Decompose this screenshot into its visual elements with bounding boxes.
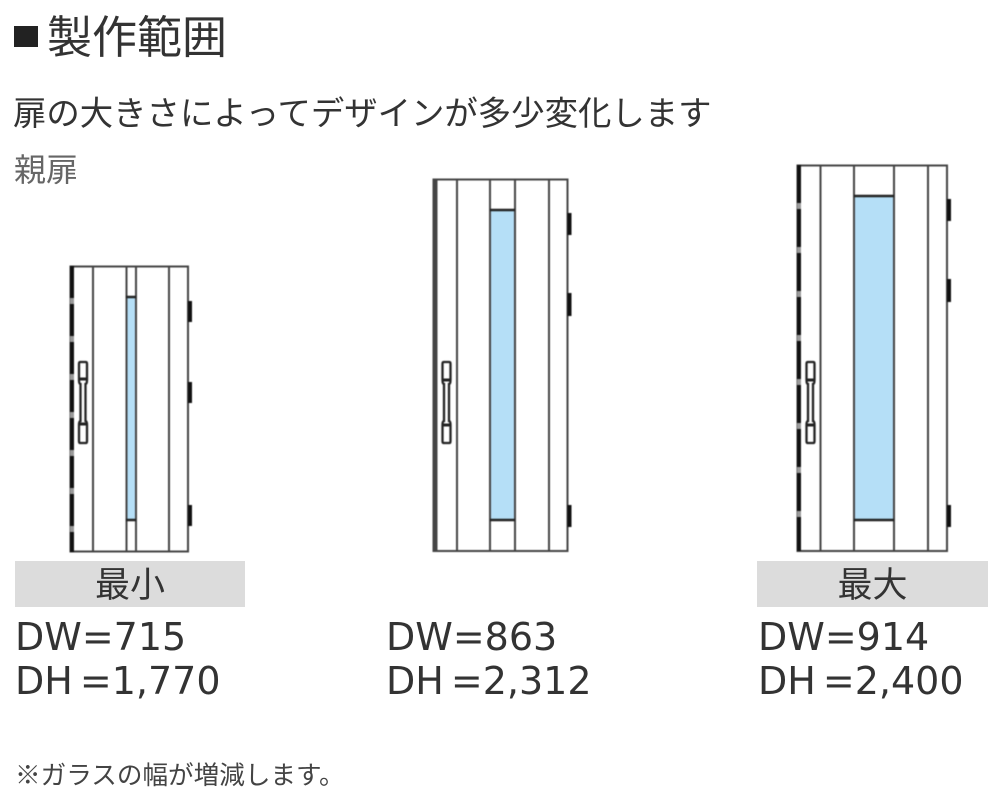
dimensions: minimum: DH =1,770 — [15, 659, 221, 703]
dimensions: maximum: DH =2,400 — [758, 659, 964, 703]
label bar: minimum: 最小 — [95, 566, 165, 605]
dimensions: minimum: DW=715 — [15, 615, 186, 659]
dimensions: middle: DH =2,312 — [386, 659, 592, 703]
footnote: ※ガラスの幅が増減します。 — [15, 762, 345, 790]
door: minimum — [70, 266, 190, 552]
door: maximum — [798, 165, 949, 551]
label bar: maximum: 最大 — [837, 566, 908, 605]
dimensions: middle: DW=863 — [386, 615, 557, 659]
dimensions: minimum — [15, 615, 221, 703]
label bar: minimum — [15, 561, 245, 607]
subtitle: 扉の大きさによってデザインが多少変化します — [13, 96, 712, 133]
label: parent door: 親扉 — [14, 152, 78, 188]
title: 製作範囲 — [47, 12, 227, 63]
dimensions: middle — [386, 615, 592, 703]
door: middle — [434, 179, 570, 551]
label bar: maximum — [757, 561, 988, 607]
dimensions: maximum — [758, 615, 964, 703]
dimensions: maximum: DW=914 — [758, 615, 929, 659]
